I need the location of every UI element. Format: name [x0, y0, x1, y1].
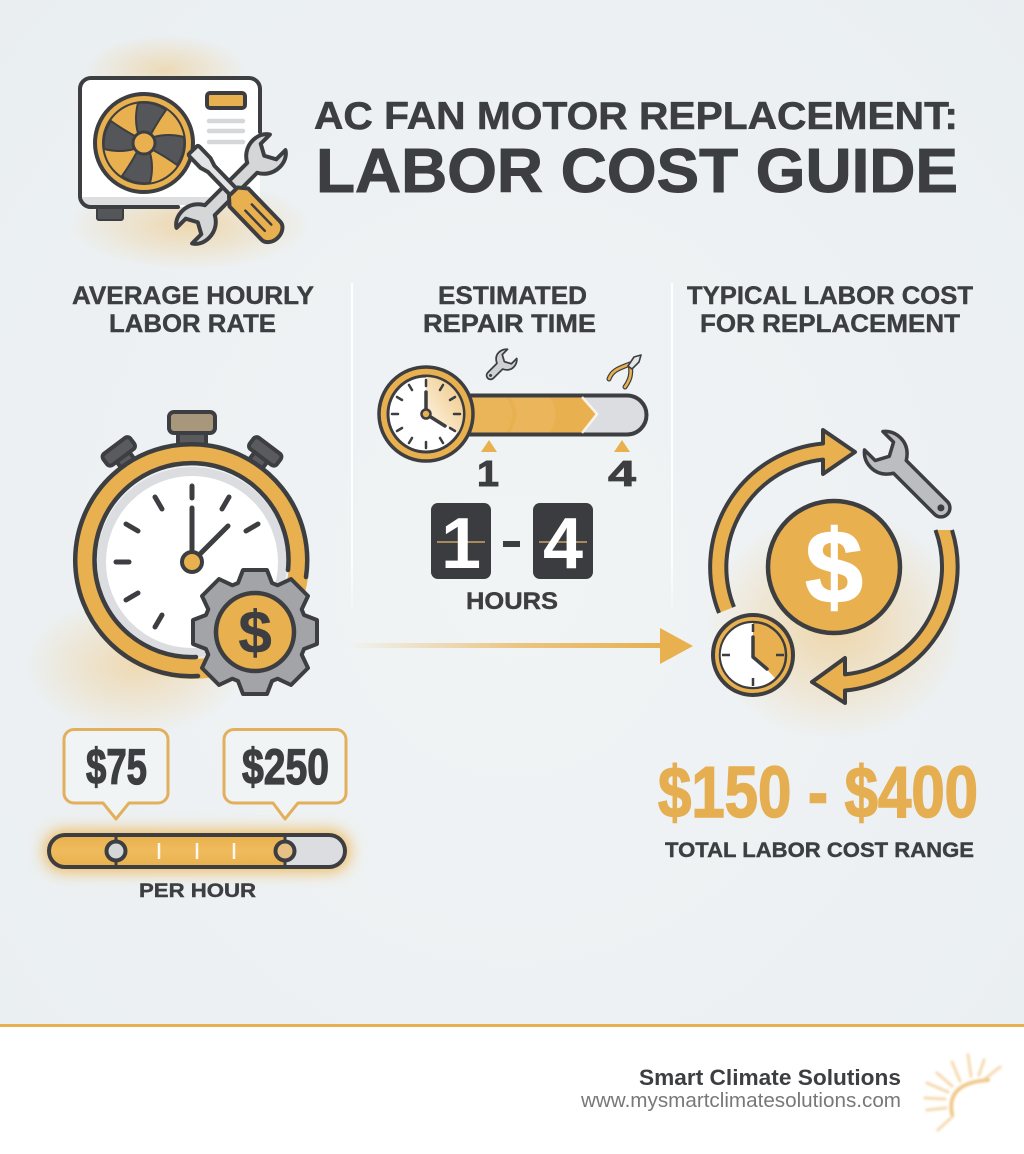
icon: small wrench — [480, 346, 520, 386]
marker: 1 hour — [477, 440, 499, 494]
flip counter: 1 - 4 — [431, 503, 593, 584]
fan — [95, 94, 193, 192]
title: AC FAN MOTOR REPLACEMENT: — [314, 95, 958, 138]
dollar coin — [768, 501, 900, 633]
icon: timer clock — [379, 367, 473, 461]
icon: pliers — [609, 355, 641, 387]
wrench — [171, 129, 291, 249]
hourly rate range bar — [45, 831, 349, 871]
arrow: flow to total cost — [348, 628, 693, 664]
price bubble: $75: $75 — [86, 739, 147, 795]
label: hours: HOURS — [466, 588, 558, 615]
heading: typical labor cost: FOR REPLACEMENT — [700, 310, 960, 338]
icon: cost cycle — [710, 426, 962, 703]
wrench — [859, 426, 962, 529]
footer: brand name and URL: www.mysmartclimatesolutions.com — [580, 1090, 901, 1112]
footer: brand name and URL — [580, 1065, 901, 1112]
price bubble: $75 — [64, 730, 168, 819]
screwdriver — [184, 141, 287, 247]
dollar gear: $ — [238, 599, 272, 666]
icon: stopwatch with dollar gear — [75, 412, 317, 694]
title — [314, 95, 958, 206]
heading: estimated repair time: REPAIR TIME — [423, 310, 596, 338]
price bubble: $250 — [224, 730, 346, 819]
AC unit body — [80, 78, 260, 220]
heading: average hourly labor rate: AVERAGE HOURLY — [72, 282, 314, 310]
marker: 1 hour: 1 — [477, 453, 499, 494]
stopwatch face — [75, 444, 307, 676]
dollar coin: $ — [805, 510, 863, 626]
footer: brand name and URL: Smart Climate Solutions — [639, 1065, 901, 1090]
label: per hour: PER HOUR — [139, 881, 256, 902]
cycle arrow: upper left — [710, 430, 855, 613]
marker: 4 hours — [608, 440, 636, 494]
heading: average hourly labor rate: LABOR RATE — [109, 310, 276, 338]
stopwatch crown and side buttons — [101, 412, 283, 478]
label: total labor cost range: TOTAL LABOR COST RANGE — [665, 839, 974, 862]
flip counter: 1 - 4: 1 — [441, 504, 481, 584]
small clock — [713, 615, 793, 695]
heading: typical labor cost: TYPICAL LABOR COST — [687, 282, 973, 310]
marker: 4 hours: 4 — [608, 453, 636, 494]
repair time progress bar — [465, 396, 646, 434]
heading: estimated repair time — [423, 282, 596, 338]
footer band — [0, 1024, 1024, 1154]
flip counter: 1 - 4: 4 — [543, 504, 583, 584]
heading: average hourly labor rate — [72, 282, 314, 338]
icon: AC unit with fan and tools — [80, 78, 291, 249]
heading: typical labor cost — [687, 282, 973, 338]
icon: sun logo — [925, 1055, 1000, 1130]
heading: estimated repair time: ESTIMATED — [438, 282, 587, 310]
price bubble: $250: $250 — [242, 739, 329, 795]
cycle arrow: lower right — [812, 530, 958, 703]
title: LABOR COST GUIDE — [316, 137, 958, 206]
dollar gear — [193, 570, 317, 694]
